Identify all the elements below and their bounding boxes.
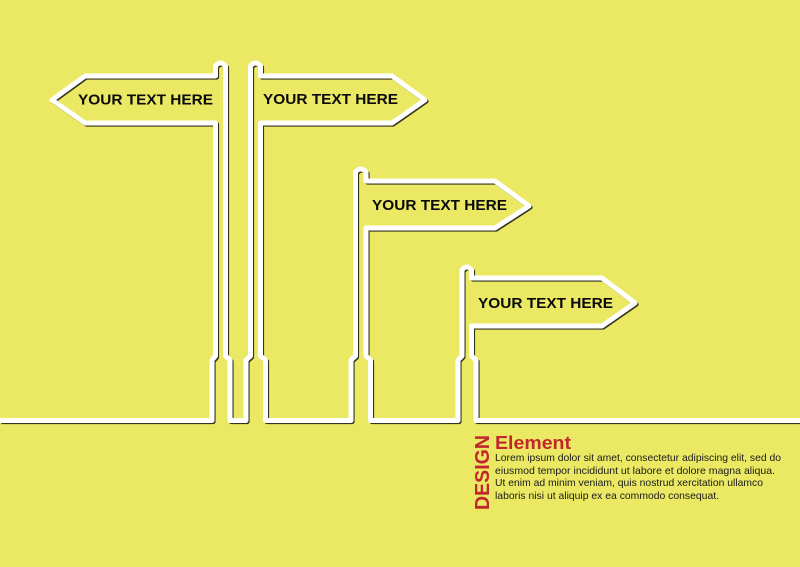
body text block: Lorem ipsum dolor sit amet, consectetur adipiscing elit, sed do	[495, 452, 781, 464]
body text block: eiusmod tempor incididunt ut labore et dolore magna aliqua.	[495, 465, 775, 477]
heading: Element: Element	[495, 433, 571, 453]
vertical heading: DESIGN: DESIGN	[472, 435, 494, 510]
body text block	[495, 452, 781, 502]
body text block: Ut enim ad minim veniam, quis nostrud xercitation ullamco	[495, 477, 763, 489]
sign label 3: YOUR TEXT HERE	[372, 198, 507, 214]
body text block: laboris nisi ut aliquip ex ea commodo consequat.	[495, 490, 719, 502]
continuous outline: baseline and signposts	[0, 63, 800, 422]
sign label 1: YOUR TEXT HERE	[78, 92, 213, 108]
sign label 2: YOUR TEXT HERE	[263, 92, 398, 108]
sign label 4: YOUR TEXT HERE	[478, 296, 613, 312]
